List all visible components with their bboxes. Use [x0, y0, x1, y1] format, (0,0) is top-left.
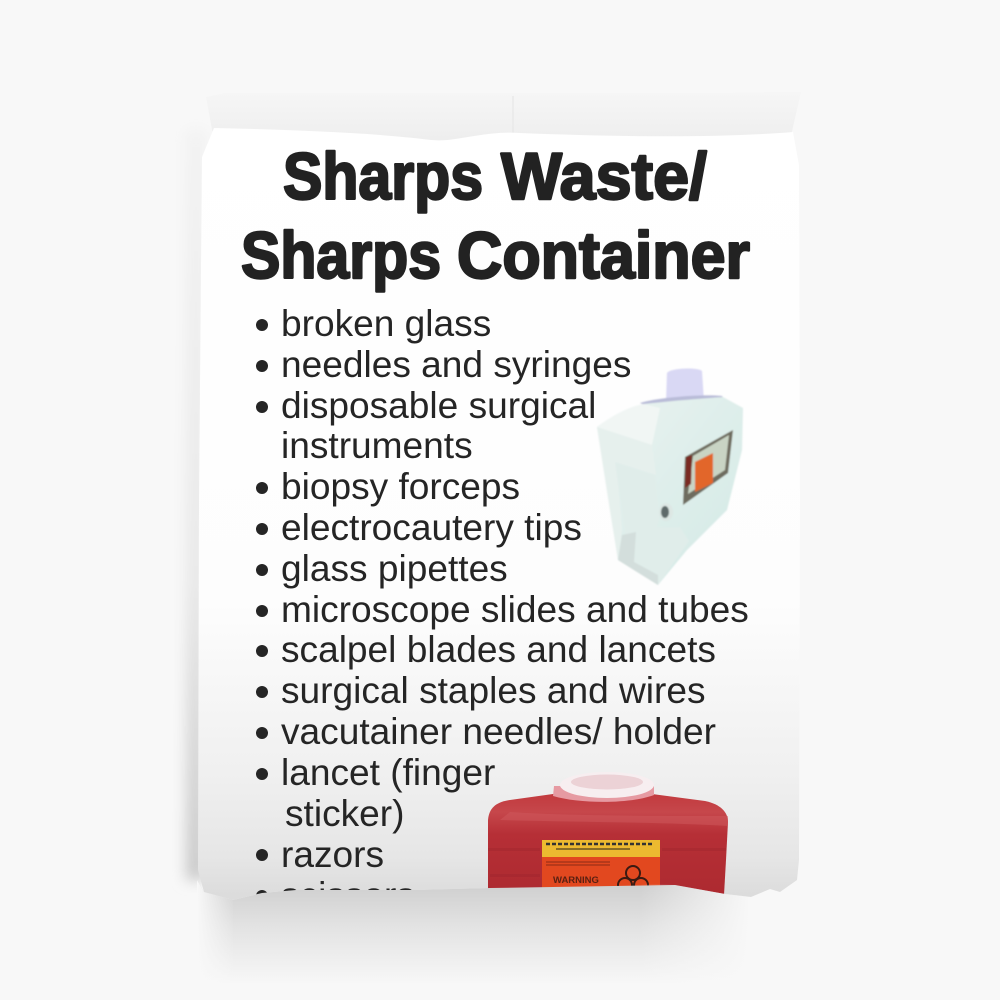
title: Sharps	[241, 218, 441, 292]
window	[683, 430, 733, 505]
sharps item list: razors	[281, 833, 384, 875]
title: Sharps	[283, 139, 483, 213]
lid	[553, 772, 654, 802]
icon: white wall-mounted sharps container	[597, 369, 743, 585]
sharps item list: lancet (finger	[281, 751, 495, 793]
sharps item list: electrocautery tips	[281, 506, 582, 548]
sharps item list: glass pipettes	[281, 547, 508, 589]
sharps item list: instruments	[281, 424, 473, 466]
sharps item list: scalpel blades and lancets	[281, 628, 716, 670]
warning label: WARNING	[553, 875, 599, 886]
sharps item list: surgical staples and wires	[281, 669, 706, 711]
title: Container	[457, 218, 750, 292]
body	[597, 397, 743, 585]
knob	[659, 503, 673, 521]
shadow below duvet	[197, 880, 830, 1000]
icon: red sharps container	[488, 772, 728, 895]
title	[241, 139, 750, 292]
top flap	[206, 92, 801, 140]
duvet cover	[198, 92, 801, 900]
title: Waste/	[501, 139, 707, 213]
sharps item list: biopsy forceps	[281, 465, 520, 507]
sharps item list: sticker)	[285, 792, 404, 834]
sharps item list: vacutainer needles/ holder	[281, 710, 716, 752]
cap	[666, 369, 704, 402]
sharps item list	[256, 302, 749, 916]
sharps item list: needles and syringes	[281, 343, 631, 385]
sharps item list: scissors	[281, 874, 415, 916]
sharps item list: disposable surgical	[281, 384, 596, 426]
main panel	[198, 128, 800, 900]
left shadow of duvet	[186, 130, 206, 880]
sharps item list: broken glass	[281, 302, 491, 344]
warning label	[542, 840, 660, 895]
sharps item list: microscope slides and tubes	[281, 588, 749, 630]
